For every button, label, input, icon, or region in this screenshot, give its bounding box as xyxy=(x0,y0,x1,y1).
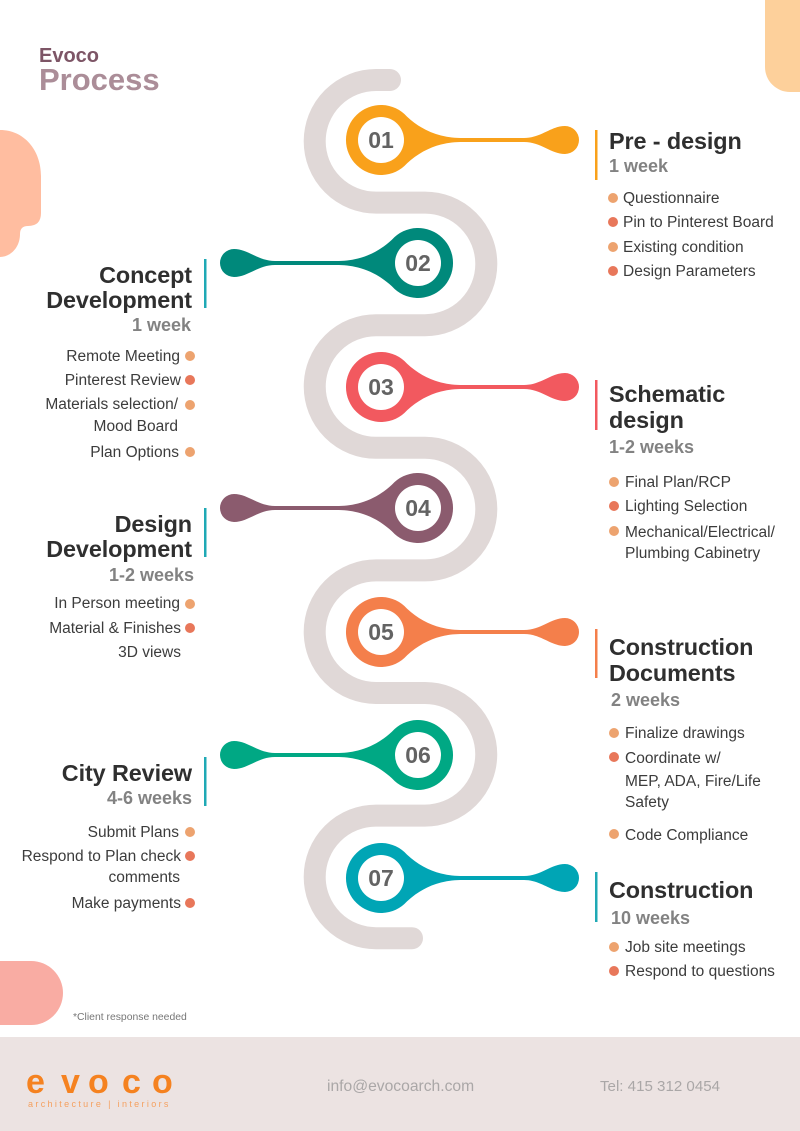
panel: schematic design: Final Plan/RCP xyxy=(625,474,731,491)
panel: construction: Respond to questions xyxy=(625,963,775,980)
pin 06: 06 xyxy=(405,742,431,768)
panel: construction documents: 2 weeks xyxy=(611,690,680,710)
panel: pre-design: Existing condition xyxy=(623,239,744,256)
pin 01 xyxy=(346,105,579,175)
panel: concept development: Plan Options xyxy=(90,444,179,461)
decorative shape: bottom left xyxy=(0,961,63,1025)
footer band xyxy=(0,1037,800,1131)
panel: construction: Job site meetings xyxy=(625,939,746,956)
panel: design development: In Person meeting xyxy=(54,595,180,612)
panel: schematic design: Schematic xyxy=(609,381,725,407)
panel: city review: Submit Plans xyxy=(88,824,179,841)
contact: phone: Tel: 415 312 0454 xyxy=(600,1078,720,1095)
panel: schematic design: 1-2 weeks xyxy=(609,437,694,457)
panel: city review: Respond to Plan check xyxy=(22,848,181,865)
panel: design development: Development xyxy=(46,536,192,562)
panel: pre-design: Design Parameters xyxy=(623,263,756,280)
panel: concept development: Materials selection/ xyxy=(45,396,179,413)
panel: design development: 1-2 weeks xyxy=(109,565,194,585)
decorative shape: top right xyxy=(765,0,800,92)
panel: pre-design: Pin to Pinterest Board xyxy=(623,214,774,231)
panel: city review xyxy=(22,757,206,912)
panel: pre-design xyxy=(595,128,774,280)
panel: schematic design: Lighting Selection xyxy=(625,498,747,515)
panel: city review: City Review xyxy=(62,760,193,786)
logo: architecture | interiors xyxy=(28,1099,171,1109)
pin 04 xyxy=(220,473,453,543)
panel: concept development: Remote Meeting xyxy=(66,348,180,365)
panel: concept development: Concept xyxy=(99,262,192,288)
contact: email: info@evocoarch.com xyxy=(327,1078,474,1095)
pin 01: 01 xyxy=(368,127,394,153)
panel: construction documents: Safety xyxy=(625,794,669,811)
panel: schematic design: Mechanical/Electrical/ xyxy=(625,524,776,541)
panel: construction documents: Finalize drawings xyxy=(625,725,745,742)
panel: design development: Design xyxy=(115,511,192,537)
panel: city review: Make payments xyxy=(72,895,181,912)
panel: city review: 4-6 weeks xyxy=(107,788,192,808)
panel: construction documents: Documents xyxy=(609,660,736,686)
panel: schematic design xyxy=(595,380,776,562)
pin 06 xyxy=(220,720,453,790)
decorative shape: left xyxy=(0,130,41,257)
panel: pre-design: 1 week xyxy=(609,156,669,176)
panel: concept development xyxy=(45,259,206,461)
logo: evoco xyxy=(26,1063,173,1101)
panel: construction documents: MEP, ADA, Fire/Life xyxy=(625,773,761,790)
panel: construction: 10 weeks xyxy=(611,908,690,928)
pin 07: 07 xyxy=(368,865,394,891)
panel: pre-design: Pre - design xyxy=(609,128,742,154)
panel: concept development: Development xyxy=(46,287,192,313)
panel: schematic design: design xyxy=(609,407,684,433)
panel: pre-design: Questionnaire xyxy=(623,190,720,207)
pin 02: 02 xyxy=(405,250,431,276)
pin 02 xyxy=(220,228,453,298)
pin 03 xyxy=(346,352,579,422)
panel: concept development: Mood Board xyxy=(94,418,178,435)
panel: construction xyxy=(595,872,775,980)
title: Evoco xyxy=(39,45,99,67)
panel: design development xyxy=(46,508,206,661)
panel: design development: 3D views xyxy=(118,644,181,661)
winding timeline path xyxy=(315,80,486,938)
panel: schematic design: Plumbing Cabinetry xyxy=(625,545,761,562)
footnote: *Client response needed xyxy=(73,1012,187,1023)
panel: construction documents: Coordinate w/ xyxy=(625,750,721,767)
title: Process xyxy=(39,62,160,97)
panel: construction documents: Code Compliance xyxy=(625,827,748,844)
panel: city review: comments xyxy=(108,869,180,886)
pin 04: 04 xyxy=(405,495,431,521)
pin 03: 03 xyxy=(368,374,394,400)
panel: concept development: 1 week xyxy=(132,315,192,335)
panel: design development: Material & Finishes xyxy=(49,620,181,637)
panel: concept development: Pinterest Review xyxy=(65,372,182,389)
title xyxy=(39,45,160,97)
pin 05 xyxy=(346,597,579,667)
panel: construction documents: Construction xyxy=(609,634,753,660)
panel: construction documents xyxy=(595,629,761,844)
pin 07 xyxy=(346,843,579,913)
pin 05: 05 xyxy=(368,619,394,645)
panel: construction: Construction xyxy=(609,877,753,903)
